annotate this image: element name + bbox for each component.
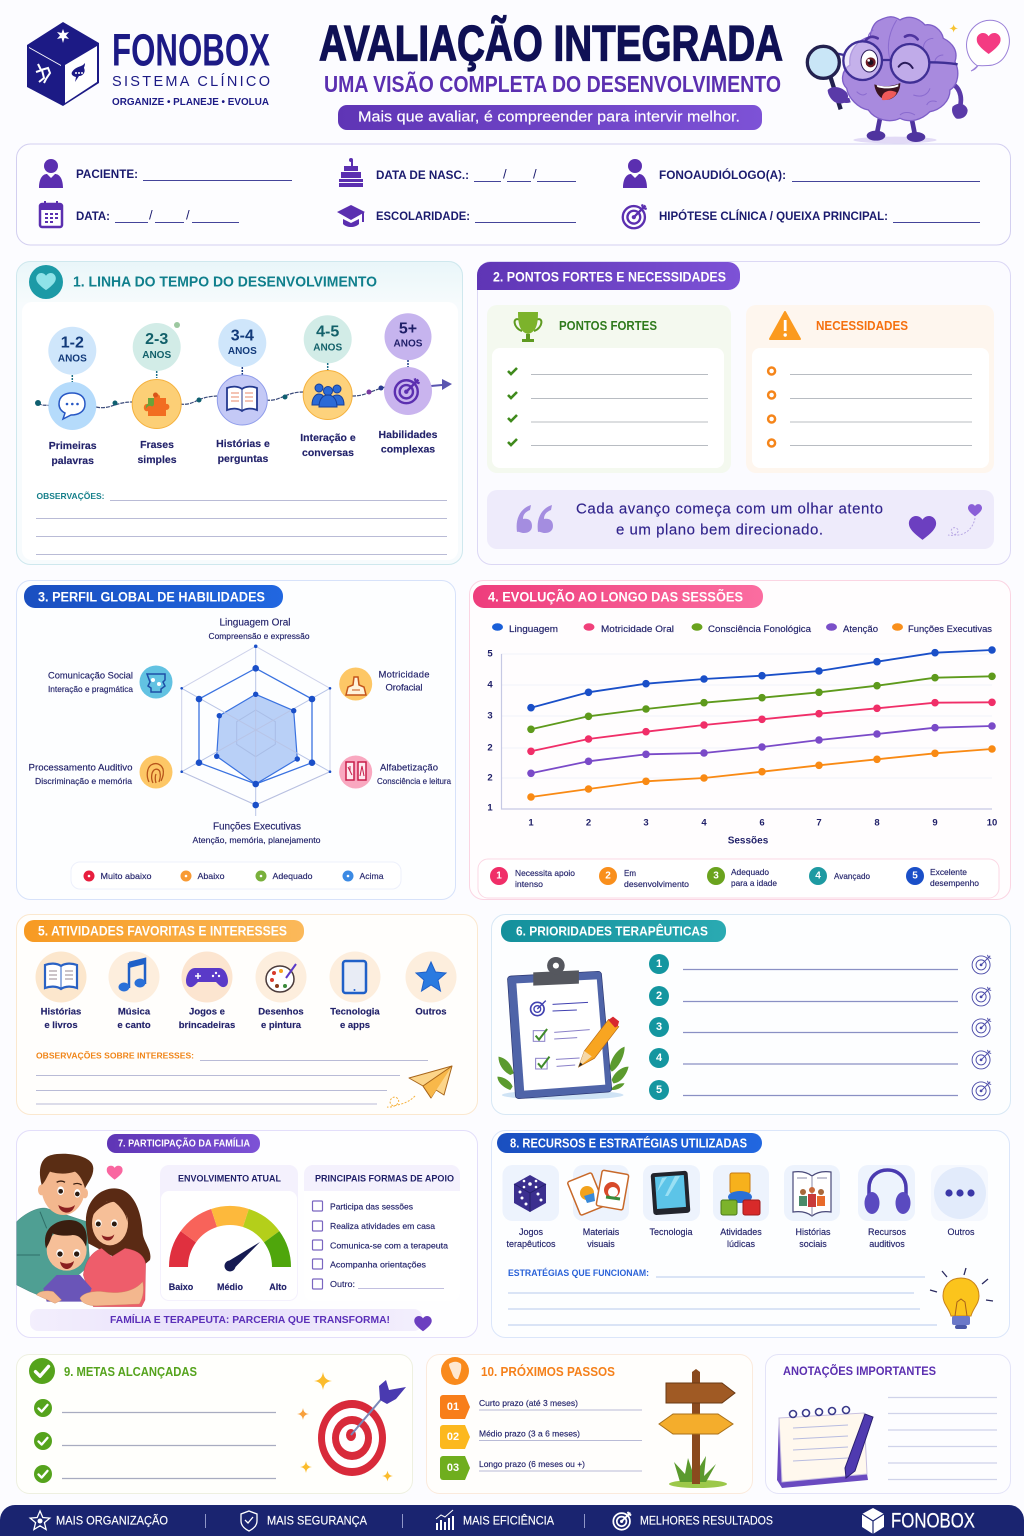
milestone: 3-4 anos xyxy=(216,319,270,465)
heading xyxy=(24,585,283,608)
performance scale: 4 xyxy=(815,870,821,882)
performance scale: Excelente xyxy=(930,867,967,877)
item: outros: Outros xyxy=(415,1006,447,1018)
title: AVALIAÇÃO INTEGRADA xyxy=(319,16,783,72)
label: motricidade xyxy=(339,668,430,700)
item: segurança: MAIS SEGURANÇA xyxy=(267,1514,367,1528)
label: alfabetização: Consciência e leitura xyxy=(377,776,451,786)
icon: calendar xyxy=(40,201,62,227)
icon: target xyxy=(623,204,647,228)
heading xyxy=(501,920,726,942)
heading: 8. RECURSOS E ESTRATÉGIAS UTILIZADAS xyxy=(510,1136,747,1150)
chart legend: Consciência Fonológica xyxy=(708,624,811,634)
field: data: / xyxy=(186,208,190,222)
panel: patient data xyxy=(16,144,1010,245)
performance scale: para a idade xyxy=(731,878,777,888)
label: comunicação social: Interação e pragmática xyxy=(48,684,133,694)
item: música xyxy=(108,952,160,1031)
milestone: 1-2 anos: ANOS xyxy=(58,354,87,364)
tagline pill xyxy=(338,105,762,130)
priority list: 3 xyxy=(656,1021,662,1033)
logo: Fonobox: SISTEMA CLÍNICO xyxy=(112,73,270,90)
performance scale: 5 xyxy=(912,870,918,882)
logo: footer xyxy=(862,1508,975,1534)
performance scale: Adequado xyxy=(731,867,769,877)
performance scale: Necessita apoio xyxy=(515,868,575,878)
resource: recursos auditivos: Recursos xyxy=(868,1227,907,1237)
heading: 3. PERFIL GLOBAL DE HABILIDADES xyxy=(38,590,265,604)
label: processamento auditivo: Discriminação e memória xyxy=(35,776,132,786)
item: música: Música xyxy=(118,1006,151,1018)
resource: histórias sociais xyxy=(784,1165,840,1249)
step: curto prazo: Curto prazo (até 3 meses) xyxy=(479,1398,578,1408)
line chart: 1 xyxy=(487,802,493,814)
item: tecnologia xyxy=(330,952,380,1031)
item: segurança xyxy=(241,1511,367,1531)
label: linguagem oral: Compreensão e expressão xyxy=(208,631,310,641)
chart legend xyxy=(492,623,993,634)
step: longo prazo: 03 xyxy=(447,1462,459,1474)
performance scale: desenvolvimento xyxy=(624,879,689,889)
heading: 7. PARTICIPAÇÃO DA FAMÍLIA xyxy=(118,1136,250,1150)
resource: materiais visuais xyxy=(567,1165,629,1249)
item: organização: MAIS ORGANIZAÇÃO xyxy=(56,1514,168,1528)
item: organização xyxy=(30,1511,168,1530)
performance scale xyxy=(478,859,999,898)
heading xyxy=(473,585,763,608)
panel 4: session evolution xyxy=(470,580,1010,900)
card: current involvement: ENVOLVIMENTO ATUAL xyxy=(178,1174,281,1184)
timeline path xyxy=(35,379,452,408)
icon: warning xyxy=(770,312,800,339)
line chart xyxy=(487,646,997,846)
label: alfabetização: Alfabetização xyxy=(380,762,438,774)
label: processamento auditivo: Processamento Auditivo xyxy=(28,762,132,774)
step: longo prazo: Longo prazo (6 meses ou +) xyxy=(479,1459,585,1469)
card: current involvement: Médio xyxy=(217,1282,244,1292)
banner: FAMÍLIA E TERAPEUTA: PARCERIA QUE TRANSFORMA! xyxy=(110,1313,390,1326)
legend: Muito abaixo xyxy=(100,871,152,881)
item: eficiência xyxy=(436,1510,554,1530)
milestone: 3-4 anos: 3-4 xyxy=(231,328,254,344)
field: data de nascimento: / xyxy=(533,166,537,182)
milestone: 5+ anos: complexas xyxy=(381,444,435,456)
checklist lines xyxy=(508,368,708,446)
performance scale: intenso xyxy=(515,879,543,889)
legend: Acima xyxy=(360,871,384,881)
step: médio prazo xyxy=(440,1425,642,1449)
heading xyxy=(497,1133,762,1153)
resource: histórias sociais: Histórias xyxy=(795,1227,831,1237)
chart legend: Atenção xyxy=(843,624,878,634)
panel 8: resources and strategies xyxy=(492,1130,1010,1338)
resource: outros: Outros xyxy=(947,1227,975,1237)
resource: histórias sociais: sociais xyxy=(799,1239,827,1249)
field: paciente: PACIENTE: xyxy=(76,167,138,181)
item: desenhos: Desenhos xyxy=(258,1006,304,1018)
resource: atividades lúdicas: lúdicas xyxy=(727,1239,756,1249)
observations xyxy=(36,1050,428,1104)
radar chart xyxy=(180,644,331,816)
line chart: 1 xyxy=(528,818,534,828)
icon: brain mascot xyxy=(807,17,1009,143)
observations: OBSERVAÇÕES: xyxy=(36,491,105,501)
panel 6: therapeutic priorities xyxy=(492,914,1010,1114)
step: longo prazo xyxy=(440,1456,642,1480)
milestone: 2-3 anos: 2-3 xyxy=(145,331,168,348)
milestone: 5+ anos: Habilidades xyxy=(379,429,438,441)
item: tecnologia: Tecnologia xyxy=(330,1006,380,1018)
subtitle: UMA VISÃO COMPLETA DO DESENVOLVIMENTO xyxy=(324,70,781,97)
card: needs: NECESSIDADES xyxy=(816,319,908,333)
heading: 6. PRIORIDADES TERAPÊUTICAS xyxy=(516,924,708,938)
icon: quote mark xyxy=(517,505,553,533)
field: hipótese clínica: HIPÓTESE CLÍNICA / QUEIXA PRINCIPAL: xyxy=(659,208,888,223)
resource: recursos auditivos: auditivos xyxy=(869,1239,905,1249)
label: comunicação social: Comunicação Social xyxy=(48,670,133,682)
label: linguagem oral: Linguagem Oral xyxy=(220,618,290,628)
resource: atividades lúdicas: Atividades xyxy=(720,1227,762,1237)
performance scale: 2 xyxy=(605,870,611,882)
item: desenhos xyxy=(256,952,306,1031)
strategies: ESTRATÉGIAS QUE FUNCIONAM: xyxy=(508,1268,649,1278)
observations xyxy=(36,491,447,554)
legend xyxy=(71,862,401,889)
milestone: 4-5 anos: 4-5 xyxy=(316,324,339,340)
item: resultados: MELHORES RESULTADOS xyxy=(640,1514,773,1528)
milestone: 2-3 anos: Frases xyxy=(140,439,174,451)
step: médio prazo: 02 xyxy=(447,1431,459,1443)
line chart: 8 xyxy=(874,818,880,828)
item: jogos: Jogos e xyxy=(189,1006,225,1018)
milestone: 5+ anos: 5+ xyxy=(399,320,417,338)
card: forms of support: Realiza atividades em casa xyxy=(330,1221,435,1231)
card: strengths xyxy=(487,305,731,473)
heading tab: 2. PONTOS FORTES E NECESSIDADES xyxy=(493,270,726,284)
icon: clipboard xyxy=(497,957,629,1100)
item: tecnologia: e apps xyxy=(340,1020,370,1031)
resource: atividades lúdicas xyxy=(713,1165,769,1249)
milestone: 2-3 anos: simples xyxy=(137,454,177,466)
resource: tecnologia xyxy=(643,1165,700,1237)
milestone: 4-5 anos xyxy=(300,315,356,459)
heading: 5. ATIVIDADES FAVORITAS E INTERESSES xyxy=(38,924,287,938)
panel 3: global skills profile xyxy=(16,580,456,900)
footer bar xyxy=(0,1505,1024,1536)
banner xyxy=(30,1309,432,1331)
heading: ANOTAÇÕES IMPORTANTES xyxy=(783,1363,936,1378)
milestone: 4-5 anos: Interação e xyxy=(300,432,356,444)
icon: speech therapist xyxy=(623,159,647,188)
panel: important notes xyxy=(766,1354,1010,1494)
quote box: e um plano bem direcionado. xyxy=(616,522,823,538)
item: outros xyxy=(406,952,456,1018)
logo: footer: FONOBOX xyxy=(891,1510,975,1532)
item: música: e canto xyxy=(117,1020,151,1031)
line chart: 7 xyxy=(816,818,822,828)
item: histórias: Histórias xyxy=(41,1006,81,1018)
heading tab xyxy=(477,262,740,290)
line chart: 10 xyxy=(987,818,997,828)
heading: 10. PRÓXIMOS PASSOS xyxy=(481,1364,615,1379)
label: linguagem oral xyxy=(208,618,310,641)
line chart: 2 xyxy=(487,772,493,784)
priority list: 2 xyxy=(656,990,662,1002)
illustration: family xyxy=(17,1154,150,1307)
quote box xyxy=(487,490,994,549)
icon: notepad xyxy=(777,1406,873,1488)
heading xyxy=(24,920,304,942)
chart legend: Funções Executivas xyxy=(908,624,993,634)
icon: patient xyxy=(39,159,63,188)
card: forms of support: PRINCIPAIS FORMAS DE APOIO xyxy=(315,1174,454,1184)
performance scale: desempenho xyxy=(930,878,979,888)
card: forms of support: Acompanha orientações xyxy=(330,1260,426,1270)
icon: paper plane xyxy=(387,1066,452,1107)
field: data de nascimento: / xyxy=(503,166,507,182)
icon: trophy xyxy=(515,312,541,342)
performance scale: 1 xyxy=(496,870,502,882)
milestone: 5+ anos: ANOS xyxy=(394,338,423,350)
gauge xyxy=(178,1216,282,1267)
label: comunicação social xyxy=(48,666,172,698)
heading: 1. LINHA DO TEMPO DO DESENVOLVIMENTO xyxy=(73,274,377,290)
legend: Abaixo xyxy=(198,871,225,881)
chart legend: Motricidade Oral xyxy=(601,624,674,634)
milestone: 4-5 anos: conversas xyxy=(302,447,354,459)
card: forms of support: Comunica-se com a terapeuta xyxy=(330,1240,448,1250)
field: data de nascimento xyxy=(376,166,576,182)
card: forms of support xyxy=(304,1165,460,1301)
step: curto prazo xyxy=(440,1395,642,1419)
priority list: 1 xyxy=(656,958,662,970)
field: data xyxy=(76,208,239,223)
priority list: 4 xyxy=(656,1052,663,1064)
step: curto prazo: 01 xyxy=(447,1401,459,1413)
milestone: 5+ anos xyxy=(379,313,438,456)
item: resultados xyxy=(613,1512,773,1530)
logo: Fonobox: FONOBOX xyxy=(112,24,270,76)
line chart: Sessões xyxy=(728,836,769,846)
icon: hearts xyxy=(909,504,982,540)
panel 1: timeline xyxy=(16,261,463,565)
field: data: DATA: xyxy=(76,209,110,223)
item: jogos: brincadeiras xyxy=(179,1020,235,1031)
card: needs xyxy=(746,305,994,473)
heading xyxy=(29,1358,197,1384)
line chart: 3 xyxy=(487,710,493,722)
label: motricidade: Orofacial xyxy=(386,682,422,694)
icon: signpost xyxy=(659,1369,735,1488)
icon: heart badge xyxy=(29,265,63,299)
chart legend: Linguagem xyxy=(509,624,558,634)
field: fonoaudiólogo: FONOAUDIÓLOGO(A): xyxy=(659,167,786,182)
item: eficiência: MAIS EFICIÊNCIA xyxy=(463,1512,554,1528)
card: forms of support: Participa das sessões xyxy=(330,1202,413,1212)
label: funções executivas xyxy=(192,822,321,845)
panel 9: goals achieved xyxy=(16,1354,412,1494)
card: forms of support: Outro: xyxy=(330,1279,355,1289)
heading xyxy=(107,1134,260,1153)
field: data: / xyxy=(149,208,153,222)
milestone: 2-3 anos: ANOS xyxy=(142,350,171,361)
heading xyxy=(441,1357,615,1385)
label: funções executivas: Funções Executivas xyxy=(213,822,301,832)
bullet lines xyxy=(768,368,972,446)
icon: birthday cake xyxy=(339,158,363,187)
line chart: 3 xyxy=(643,818,649,828)
resource: jogos terapêuticos xyxy=(502,1165,559,1249)
resource: jogos terapêuticos: terapêuticos xyxy=(506,1239,556,1249)
goal lines xyxy=(34,1399,276,1483)
card: current involvement xyxy=(160,1165,298,1301)
icon: cube xyxy=(27,22,99,106)
resource: materiais visuais: Materiais xyxy=(583,1227,620,1237)
icon: graduation cap xyxy=(337,205,365,227)
milestone: 1-2 anos xyxy=(48,327,97,467)
item: jogos xyxy=(179,952,235,1031)
milestone: 2-3 anos xyxy=(132,322,181,466)
heading: 4. EVOLUÇÃO AO LONGO DAS SESSÕES xyxy=(488,590,743,604)
panel 2: strengths and needs xyxy=(477,262,1010,564)
item: desenhos: e pintura xyxy=(261,1020,302,1031)
line chart: 9 xyxy=(932,818,938,828)
label: motricidade: Motricidade xyxy=(378,670,430,680)
priority list xyxy=(649,954,991,1100)
panel 10: next steps xyxy=(426,1354,752,1494)
heading: 9. METAS ALCANÇADAS xyxy=(64,1365,197,1379)
label: funções executivas: Atenção, memória, planejamento xyxy=(192,835,321,845)
line chart: 5 xyxy=(487,648,493,660)
milestone: 3-4 anos: ANOS xyxy=(228,346,257,357)
label: alfabetização xyxy=(339,756,451,788)
card: strengths: PONTOS FORTES xyxy=(559,319,657,333)
resource: recursos auditivos xyxy=(858,1165,915,1249)
step: médio prazo: Médio prazo (3 a 6 meses) xyxy=(479,1428,580,1438)
card: current involvement: Alto xyxy=(269,1282,287,1292)
logo: Fonobox xyxy=(27,22,270,108)
strategies xyxy=(508,1268,937,1325)
note lines xyxy=(888,1398,997,1480)
logo: Fonobox: ORGANIZE • PLANEJE • EVOLUA xyxy=(112,96,269,108)
performance scale: Em xyxy=(624,868,636,878)
observations: OBSERVAÇÕES SOBRE INTERESSES: xyxy=(36,1050,194,1060)
priority list: 5 xyxy=(656,1084,662,1096)
legend: Adequado xyxy=(272,871,313,881)
milestone: 1-2 anos: palavras xyxy=(51,455,94,467)
item: histórias xyxy=(36,952,86,1031)
milestone: 4-5 anos: ANOS xyxy=(313,342,342,354)
icon: target with arrow xyxy=(297,1372,406,1482)
milestone: 1-2 anos: Primeiras xyxy=(49,440,97,452)
performance scale: Avançado xyxy=(834,871,870,881)
label: processamento auditivo xyxy=(28,756,172,788)
resource: outros xyxy=(931,1165,988,1237)
resource: tecnologia: Tecnologia xyxy=(649,1227,693,1237)
line chart: 4 xyxy=(487,680,493,690)
performance scale: 3 xyxy=(713,870,719,882)
line chart: 4 xyxy=(701,818,707,828)
quote box: Cada avanço começa com um olhar atento xyxy=(576,500,883,518)
resource: materiais visuais: visuais xyxy=(587,1239,615,1249)
milestone: 3-4 anos: Histórias e xyxy=(216,438,270,450)
line chart: 6 xyxy=(759,818,765,828)
resource: jogos terapêuticos: Jogos xyxy=(519,1227,544,1237)
milestone: 1-2 anos: 1-2 xyxy=(61,334,84,352)
line chart: 2 xyxy=(586,818,591,828)
card: current involvement: Baixo xyxy=(169,1282,194,1292)
icon: light bulb xyxy=(930,1268,993,1329)
panel 5: favorite activities xyxy=(16,914,478,1114)
milestone: 3-4 anos: perguntas xyxy=(218,453,269,465)
tagline pill: Mais que avaliar, é compreender para intervir melhor. xyxy=(358,108,740,126)
line chart: 2 xyxy=(487,742,493,754)
field: data de nascimento: DATA DE NASC.: xyxy=(376,168,469,182)
item: histórias: e livros xyxy=(44,1020,78,1031)
panel 7: family participation xyxy=(16,1130,478,1338)
field: escolaridade: ESCOLARIDADE: xyxy=(376,209,470,223)
